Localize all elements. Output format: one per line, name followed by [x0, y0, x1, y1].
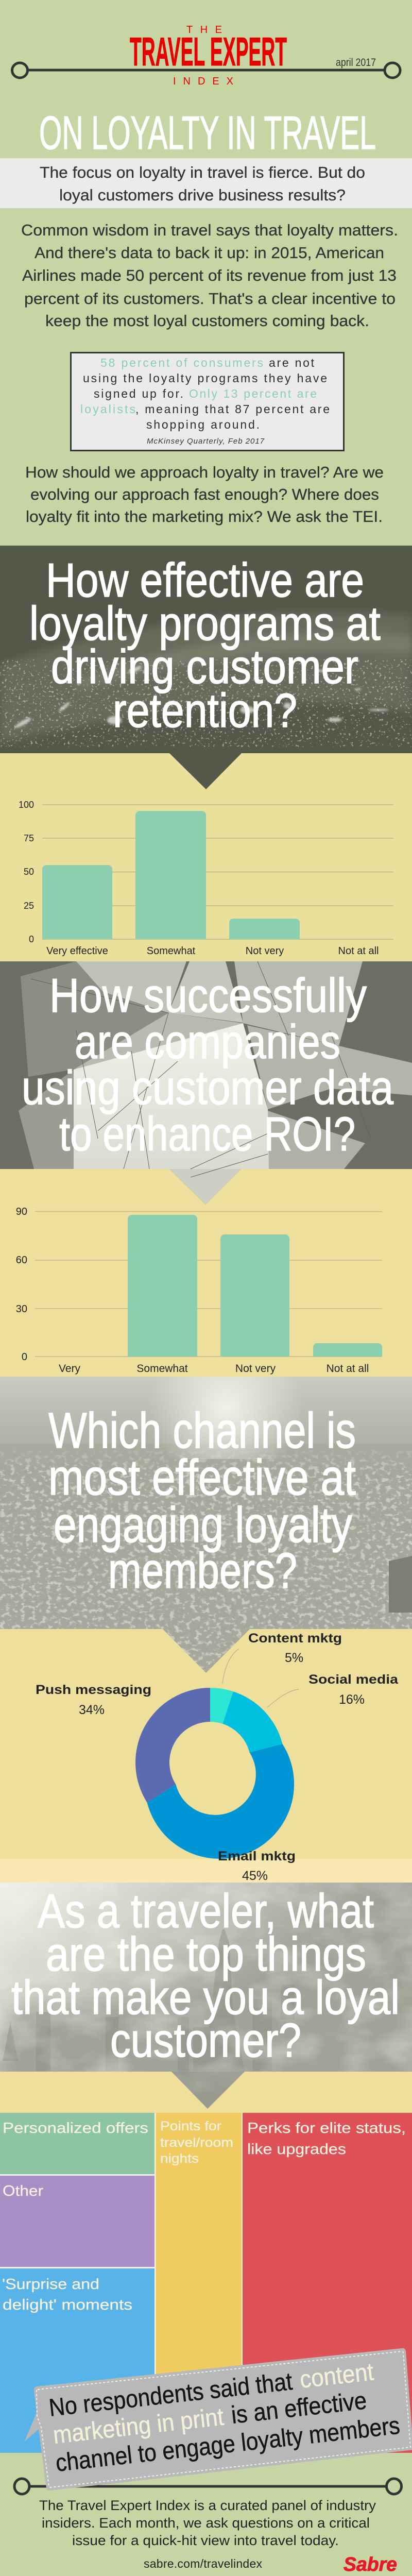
footer description: issue for a quick-hit view into travel today. — [72, 2533, 339, 2548]
treemap: reasons for loyalty: Points for — [160, 2119, 221, 2133]
callout: McKinsey statistic: loyalists — [80, 402, 135, 416]
bar chart: effectiveness of loyalty programs: Not very — [246, 945, 284, 957]
heading: question 3: most effective at — [48, 1449, 356, 1505]
callout: McKinsey statistic: , meaning that 87 percent are — [135, 402, 330, 416]
callout: McKinsey statistic — [71, 352, 344, 450]
donut chart: channel effectiveness: 16% — [339, 1692, 365, 1707]
bar chart: effectiveness of loyalty programs: 75 — [24, 833, 34, 843]
intro band: loyal customers drive business results? — [59, 186, 346, 204]
footer description — [39, 2498, 376, 2548]
closing intro paragraph: How should we approach loyalty in travel? Are we — [25, 463, 384, 481]
panel: question 3 city image — [0, 1377, 412, 1673]
intro band: The focus on loyalty in travel is fierce. But do — [40, 163, 365, 181]
bar chart: effectiveness of loyalty programs: Very effective — [46, 945, 108, 957]
header: travel expert index logo: april 2017 — [336, 57, 376, 69]
bar chart: use of customer data: 90 — [16, 1206, 27, 1217]
bar chart: use of customer data: Not at all — [327, 1363, 369, 1375]
bar chart: use of customer data: Very — [59, 1363, 81, 1375]
header: travel expert index logo: INDEX — [173, 76, 233, 87]
body paragraph: Airlines made 50 percent of its revenue from just 13 — [22, 266, 397, 284]
bar chart: effectiveness of loyalty programs — [19, 800, 393, 957]
donut chart: channel effectiveness: Push messaging — [36, 1683, 151, 1697]
header: travel expert index logo — [12, 24, 400, 87]
panel: pale band behind email label — [0, 1859, 412, 1883]
heading: question 2: are companies — [75, 1015, 340, 1069]
heading: question 2 — [22, 969, 393, 1161]
donut chart: channel effectiveness: 5% — [285, 1651, 303, 1665]
callout: no respondents speech bubble — [25, 2348, 412, 2490]
body paragraph: Common wisdom in travel says that loyalty matters. — [21, 221, 398, 239]
heading: question 3 — [48, 1402, 356, 1599]
donut chart: channel effectiveness: Social media — [308, 1672, 399, 1687]
donut chart: channel effectiveness — [36, 1631, 399, 1883]
treemap: reasons for loyalty: Perks for elite status, — [247, 2120, 406, 2137]
bar chart: use of customer data: 0 — [22, 1351, 27, 1363]
body paragraph — [21, 221, 398, 330]
callout: McKinsey statistic: shopping around. — [146, 418, 260, 431]
bar chart: use of customer data: Somewhat — [136, 1363, 188, 1375]
body paragraph: keep the most loyal customers coming back. — [45, 312, 369, 330]
callout: McKinsey statistic: are not — [269, 356, 315, 369]
panel: question 4 skyline image — [0, 1883, 412, 2112]
heading: question 1: How effective are — [46, 553, 364, 607]
donut chart: channel effectiveness: Email mktg — [218, 1849, 296, 1863]
heading: question 1: retention? — [113, 684, 297, 737]
bar chart: use of customer data: 30 — [16, 1303, 27, 1315]
intro band — [0, 158, 412, 208]
panel: question 2 architecture image — [0, 961, 412, 1205]
bar chart: effectiveness of loyalty programs: 25 — [24, 901, 34, 911]
bar chart: use of customer data — [16, 1206, 382, 1375]
heading: question 1 — [29, 553, 381, 737]
footer description: insiders. Each month, we ask questions on a critical — [42, 2515, 370, 2531]
callout: no respondents speech bubble: is an effective — [230, 2387, 368, 2429]
closing intro paragraph — [25, 463, 384, 526]
callout: McKinsey statistic: Only 13 percent are — [189, 387, 317, 400]
footer url: sabre.com/travelindex — [144, 2557, 263, 2570]
panel: chart 2 background — [0, 1169, 412, 1377]
donut chart: channel effectiveness: 45% — [242, 1869, 268, 1883]
callout: McKinsey statistic: using the loyalty programs they have — [83, 371, 327, 385]
treemap: reasons for loyalty: 'Surprise and — [2, 2276, 99, 2293]
heading: question 4 — [11, 1884, 400, 2067]
donut chart: channel effectiveness: 34% — [79, 1703, 105, 1717]
callout: no respondents speech bubble: content — [298, 2358, 375, 2394]
icon: Sabre logo: Sabre — [344, 2554, 397, 2575]
panel: chart 3 background — [0, 1629, 412, 1859]
heading: question 4: are the top things — [46, 1927, 366, 1981]
treemap: reasons for loyalty: nights — [160, 2151, 199, 2166]
heading: question 2: How successfully — [49, 969, 367, 1022]
callout: McKinsey statistic: 58 percent of consumers — [100, 356, 263, 369]
bar chart: use of customer data: 60 — [16, 1255, 27, 1266]
closing intro paragraph: loyalty fit into the marketing mix? We ask the TEI. — [26, 507, 383, 526]
closing intro paragraph: evolving our approach fast enough? Where does — [30, 485, 379, 503]
header: travel expert index logo: THE — [186, 24, 222, 36]
callout: no respondents speech bubble: No respondents said that — [47, 2368, 294, 2422]
heading: question 2: to enhance ROI? — [59, 1107, 355, 1161]
bar chart: effectiveness of loyalty programs: Somewhat — [147, 945, 196, 957]
heading: question 3: members? — [108, 1543, 297, 1599]
bar chart: effectiveness of loyalty programs: Not at all — [338, 945, 379, 957]
bar chart: use of customer data: Not very — [235, 1363, 276, 1375]
treemap: reasons for loyalty: travel/room — [160, 2136, 233, 2150]
bar chart: effectiveness of loyalty programs: 0 — [29, 934, 34, 944]
callout: no respondents speech bubble: marketing in print — [52, 2403, 225, 2449]
panel: question 1 earth at night image — [0, 546, 412, 789]
body paragraph: And there's data to back it up: in 2015, American — [35, 244, 384, 262]
treemap: reasons for loyalty: Other — [3, 2183, 43, 2199]
callout: McKinsey statistic: McKinsey Quarterly, Feb 2017 — [147, 437, 265, 446]
bar chart: effectiveness of loyalty programs: 100 — [19, 800, 34, 810]
footer description: The Travel Expert Index is a curated panel of industry — [39, 2498, 376, 2513]
heading: question 1: driving customer — [51, 640, 358, 693]
treemap: reasons for loyalty: like upgrades — [247, 2141, 346, 2158]
treemap: reasons for loyalty: Personalized offers — [3, 2120, 148, 2137]
footer divider line — [14, 2479, 402, 2494]
heading: question 4: customer? — [110, 2013, 301, 2067]
donut chart: channel effectiveness: Content mktg — [248, 1631, 342, 1646]
callout: McKinsey statistic: signed up for. — [94, 387, 183, 400]
bar chart: effectiveness of loyalty programs: 50 — [24, 867, 34, 877]
treemap: reasons for loyalty — [0, 2113, 412, 2453]
treemap: reasons for loyalty: delight' moments — [3, 2297, 132, 2313]
body paragraph: percent of its customers. That's a clear incentive to — [24, 290, 396, 308]
panel: chart 1 background — [0, 753, 412, 961]
panel: treemap yellow background — [0, 2072, 412, 2113]
heading: question 3: engaging loyalty — [54, 1497, 352, 1553]
